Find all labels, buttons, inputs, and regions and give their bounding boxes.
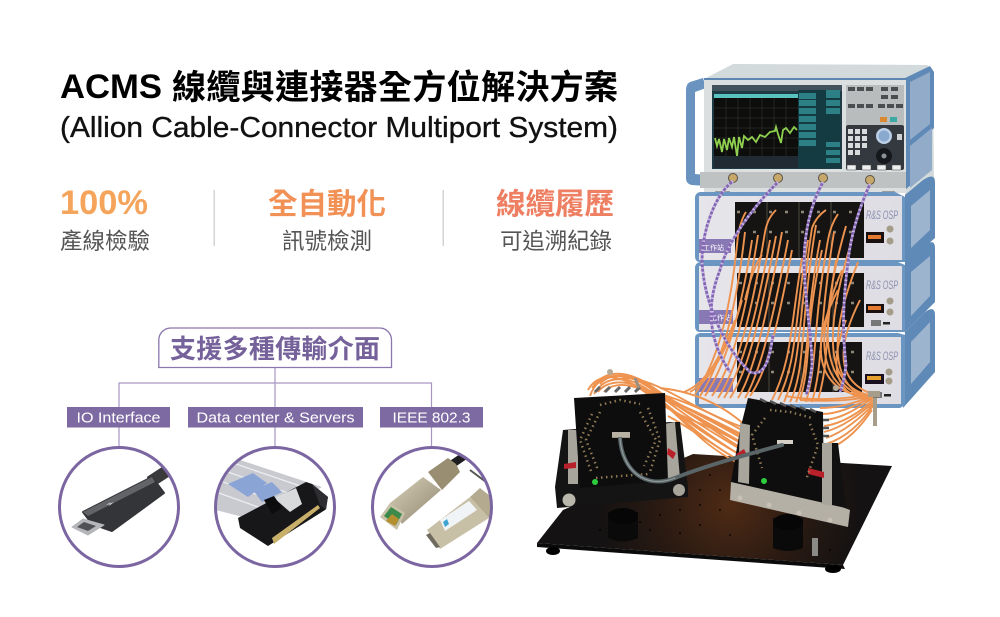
left fixture thumb screws — [562, 494, 576, 506]
analyzer ports — [728, 174, 874, 184]
left fixture pin ring — [580, 400, 660, 478]
center fan to switch slots — [772, 210, 838, 402]
RF switch unit 2: R&S OSP — [866, 278, 898, 292]
label: Data center and Servers: Data center & Servers — [196, 410, 355, 426]
left fan to switch slots — [684, 210, 792, 398]
stat: 100% production line inspection — [60, 184, 150, 254]
analyzer screen — [712, 85, 842, 169]
stat: 100% production line inspection: 產線檢驗 — [60, 229, 150, 254]
heading: multiple interfaces supported: 支援多種傳輸介面 — [170, 334, 380, 364]
title: 線纜與連接器全方位解決方案 — [172, 69, 618, 107]
analyzer top and side — [706, 64, 934, 196]
cable end connectors — [595, 369, 880, 426]
right fan from right knot — [785, 226, 874, 450]
analyzer handle — [686, 78, 707, 186]
stat: cable history traceable: 線纜履歷 — [496, 188, 614, 221]
optical breadboard base plate — [537, 454, 892, 573]
stat: fully automated signal test: 訊號檢測 — [282, 229, 372, 254]
stat: fully automated signal test: 全自動化 — [268, 188, 386, 221]
RF switch unit 3 — [695, 309, 935, 408]
icon: Thunderbolt USB-C connector in circle — [60, 448, 178, 566]
analyzer front panel — [704, 78, 906, 193]
right fixture PCB — [731, 398, 824, 505]
network analyzer instrument — [686, 64, 934, 196]
RF switch unit 3: R&S OSP — [866, 349, 898, 363]
right fixture bracket — [738, 423, 750, 484]
left test fixture — [555, 393, 688, 508]
heading: multiple interfaces supported — [159, 328, 392, 368]
RF switch unit 1: 工作站 — [703, 243, 724, 252]
title: ACMS — [60, 68, 162, 106]
left fixture bracket — [555, 422, 688, 508]
icon: SFP transceivers in circle — [372, 448, 495, 566]
analyzer hardkeys and keypad — [846, 85, 904, 170]
icon: ribbon cable connector in circle — [216, 448, 334, 566]
label: IO Interface — [67, 407, 170, 428]
RF switch unit 2: 工作站 — [710, 313, 731, 322]
label: IEEE 802.3 — [380, 407, 483, 428]
cable bundle from left fixture — [588, 374, 750, 462]
right fixture cable ends — [760, 399, 829, 436]
orange cable harness — [588, 210, 880, 462]
purple switch cables — [702, 181, 870, 395]
left fixture PCB — [574, 393, 668, 488]
stat: cable history traceable — [496, 188, 614, 254]
stat: cable history traceable: 可追溯紀錄 — [500, 229, 612, 254]
RF switch unit 1: R&S OSP — [866, 208, 898, 222]
RF switch unit 1 — [695, 176, 935, 264]
connector tree lines — [119, 368, 432, 470]
stat: 100% production line inspection: 100% — [60, 184, 148, 222]
right test fixture — [730, 398, 850, 527]
stat: fully automated signal test — [268, 188, 386, 254]
label: IEEE 802.3: IEEE 802.3 — [392, 410, 470, 426]
right fixture pin ring — [752, 410, 818, 480]
subtitle: (Allion Cable-Connector Multiport System) — [60, 112, 618, 144]
label: IO Interface: IO Interface — [76, 410, 160, 426]
RF switch unit 2 — [695, 242, 935, 332]
test cable loop between fixtures — [612, 432, 782, 482]
